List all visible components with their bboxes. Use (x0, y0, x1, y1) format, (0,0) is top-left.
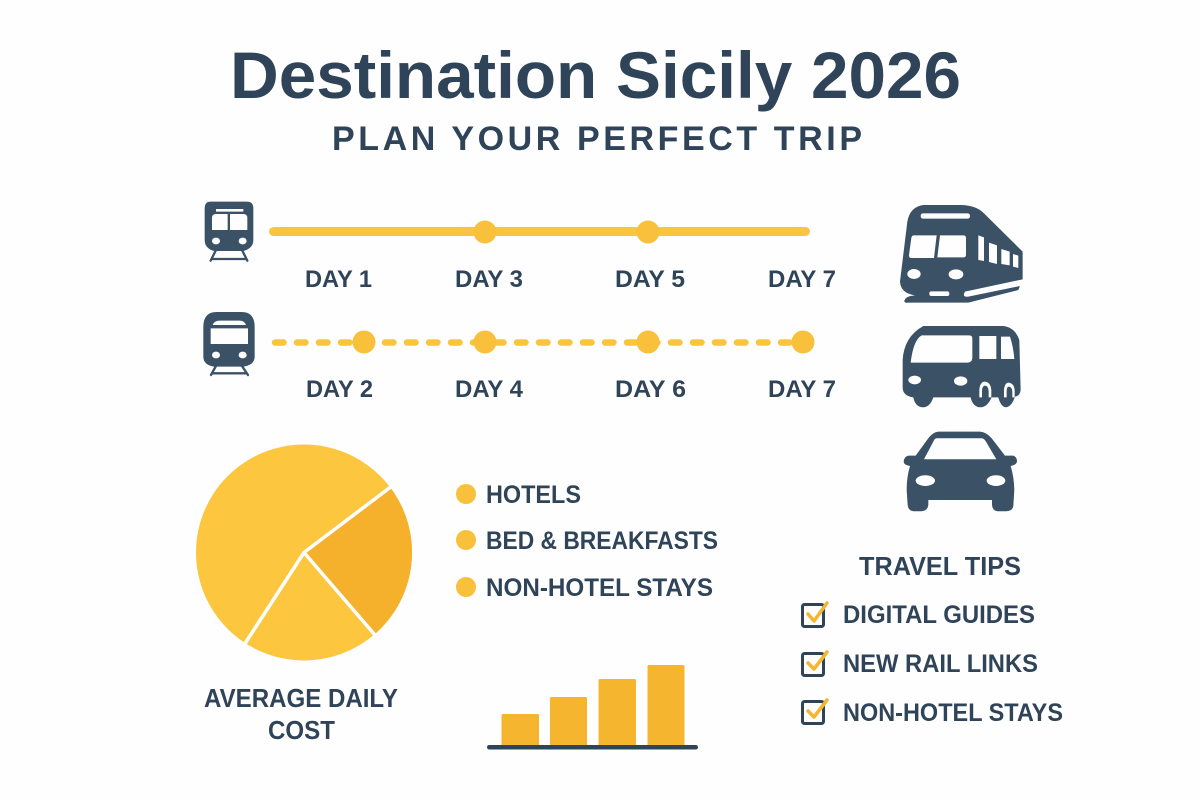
legend: NON-HOTEL STAYS (486, 574, 713, 602)
day labels row 1: DAY 5 (615, 266, 685, 293)
day labels row 1: DAY 1 (305, 266, 372, 293)
legend: BED & BREAKFASTS (486, 527, 718, 555)
pie caption: COST (268, 715, 335, 745)
day labels row 1: DAY 3 (455, 266, 523, 293)
day labels row 1: DAY 7 (768, 266, 836, 293)
timeline row 2 (275, 330, 814, 354)
icon: large train (900, 205, 1023, 303)
timeline row 1 (269, 220, 810, 244)
icon: bus (903, 326, 1021, 407)
day labels row 2 (306, 376, 836, 403)
day labels row 2: DAY 6 (615, 376, 686, 403)
subtitle: PLAN YOUR PERFECT TRIP (332, 120, 862, 158)
icon: small train, row 2 (203, 312, 255, 375)
bar chart (487, 665, 698, 750)
pie caption (204, 683, 398, 745)
pie caption: AVERAGE DAILY (204, 683, 398, 713)
legend (456, 481, 718, 602)
travel tip: non-hotel stays: NON-HOTEL STAYS (843, 699, 1063, 727)
travel tips heading: TRAVEL TIPS (859, 551, 1021, 581)
pie chart (196, 444, 412, 660)
title: Destination Sicily 2026 (230, 38, 961, 112)
travel tip: digital guides: DIGITAL GUIDES (843, 601, 1035, 629)
travel tip: new rail links: NEW RAIL LINKS (843, 650, 1038, 678)
icon: small train, row 1 (205, 202, 253, 261)
day labels row 1 (305, 266, 836, 293)
day labels row 2: DAY 7 (768, 376, 836, 403)
legend: HOTELS (486, 481, 581, 509)
day labels row 2: DAY 2 (306, 376, 373, 403)
day labels row 2: DAY 4 (455, 376, 524, 403)
icon: car (904, 432, 1017, 511)
